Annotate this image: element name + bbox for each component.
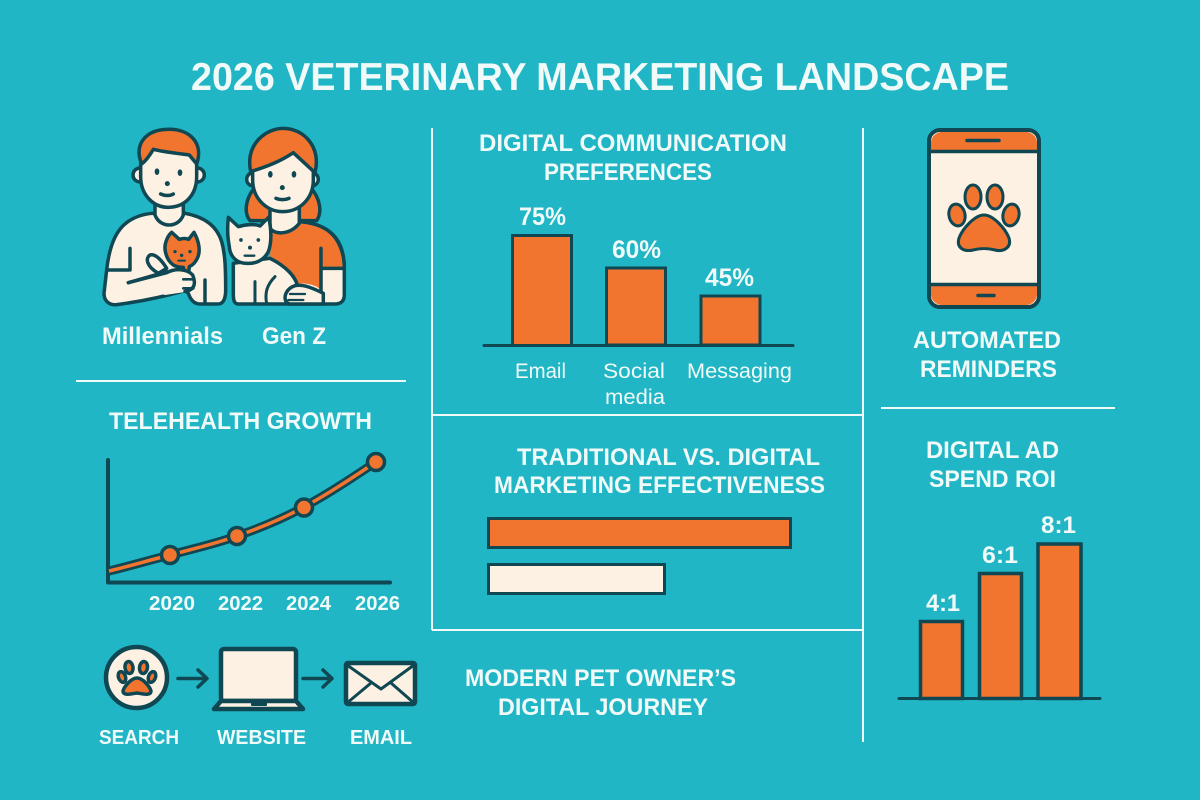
heading: communication preferences: PREFERENCES bbox=[544, 159, 712, 186]
label: email: EMAIL bbox=[350, 727, 412, 749]
panel: telehealth growth bbox=[108, 408, 400, 615]
icon: email envelope bbox=[346, 663, 415, 704]
panel: digital ad spend ROI bbox=[899, 437, 1100, 698]
bar chart: preferences: Social bbox=[603, 360, 665, 383]
heading: automated reminders: REMINDERS bbox=[920, 356, 1057, 383]
panel: digital journey bbox=[99, 647, 736, 749]
label: search: SEARCH bbox=[99, 727, 179, 749]
heading: digital journey: MODERN PET OWNER’S bbox=[465, 665, 736, 692]
bar chart: preferences: 75% bbox=[519, 203, 566, 231]
label: website: WEBSITE bbox=[217, 727, 306, 749]
chart axis years bbox=[149, 593, 400, 615]
bar chart: ROI: 6:1 bbox=[982, 542, 1018, 569]
heading: marketing effectiveness: MARKETING EFFECTIVENESS bbox=[494, 472, 825, 499]
chart axis years: 2020 bbox=[149, 593, 195, 615]
heading: ad spend ROI: DIGITAL AD bbox=[926, 437, 1059, 464]
title: 2026 VETERINARY MARKETING LANDSCAPE bbox=[191, 56, 1009, 99]
chart axis years: 2022 bbox=[218, 593, 263, 615]
bar chart: ROI: 8:1 bbox=[1041, 512, 1076, 539]
heading: communication preferences: DIGITAL COMMUNICATION bbox=[479, 130, 787, 157]
bar: traditional bbox=[488, 564, 664, 594]
bar chart: ROI bbox=[899, 512, 1100, 698]
arrow: search to website bbox=[178, 670, 207, 687]
bar chart: preferences: 45% bbox=[705, 264, 754, 292]
bar chart: preferences bbox=[484, 203, 793, 409]
chart axis years: 2026 bbox=[355, 593, 400, 615]
heading: telehealth growth: TELEHEALTH GROWTH bbox=[109, 408, 372, 435]
heading: digital journey: DIGITAL JOURNEY bbox=[498, 694, 708, 721]
bar chart: preferences: media bbox=[605, 386, 665, 409]
icon: phone with paw bbox=[929, 130, 1039, 307]
icon: search paw bbox=[106, 647, 167, 708]
bar chart: preferences: 60% bbox=[612, 236, 661, 264]
chart axis years: 2024 bbox=[286, 593, 332, 615]
panel: generations with pets bbox=[102, 128, 344, 350]
bar chart: preferences: Messaging bbox=[687, 360, 792, 383]
panel: traditional vs digital bbox=[488, 444, 825, 594]
panel: digital communication preferences bbox=[479, 130, 793, 409]
bar: digital bbox=[488, 518, 790, 548]
bar chart: ROI: 4:1 bbox=[926, 590, 960, 617]
line chart bbox=[108, 454, 390, 582]
label: Gen Z: Gen Z bbox=[262, 323, 326, 350]
icon: gen z woman with cat bbox=[228, 128, 344, 304]
icon: millennial man with cat bbox=[104, 129, 226, 305]
label: Millennials: Millennials bbox=[102, 323, 223, 350]
heading: ad spend ROI: SPEND ROI bbox=[929, 466, 1056, 493]
icon: laptop bbox=[214, 649, 303, 709]
panel: automated reminders bbox=[913, 130, 1061, 383]
bar chart: preferences: Email bbox=[515, 360, 566, 383]
heading: marketing effectiveness: TRADITIONAL VS. DIGITAL bbox=[517, 444, 820, 471]
heading: automated reminders: AUTOMATED bbox=[913, 327, 1061, 354]
arrow: website to email bbox=[303, 670, 332, 687]
